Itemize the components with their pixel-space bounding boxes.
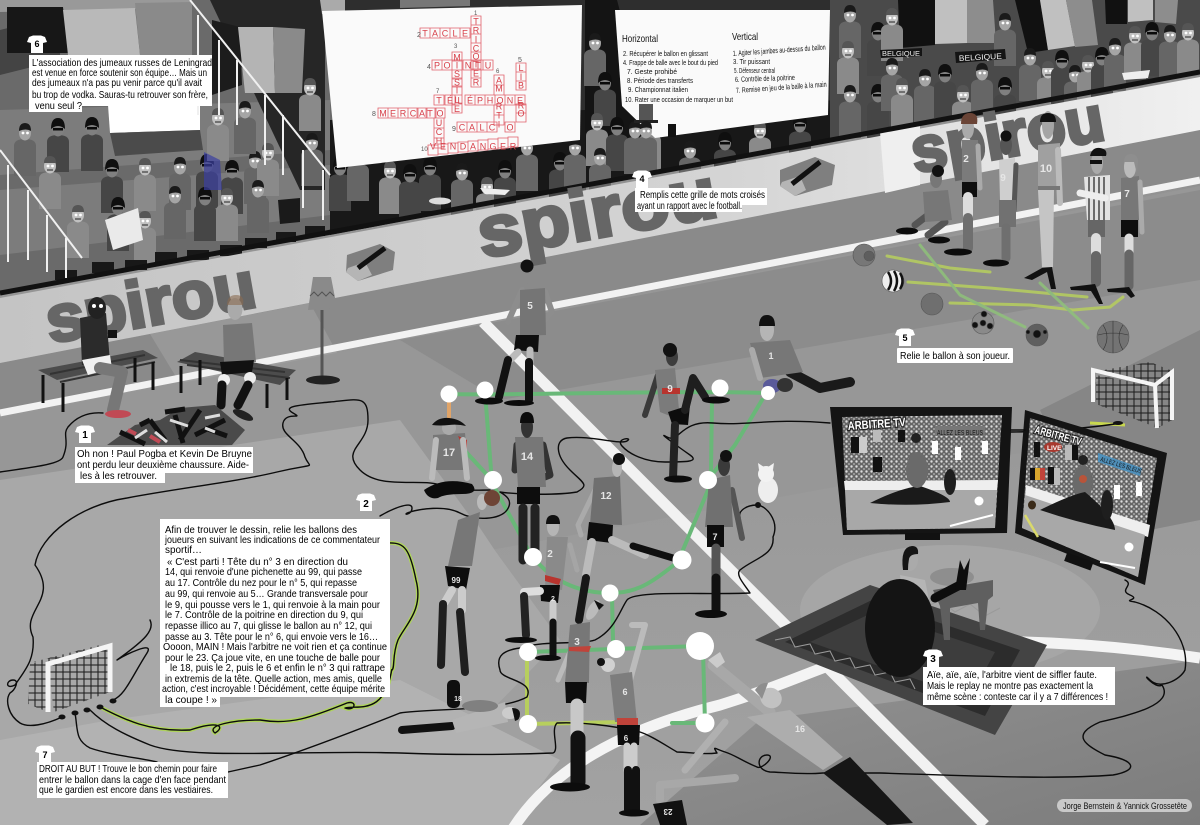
text box 2: commentator: « C'est parti ! Tête du n° 3 en direction du — [167, 556, 348, 568]
crossword grid: MERCATO — [379, 108, 444, 118]
player 23 upside down — [653, 722, 735, 825]
player 9 — [645, 343, 730, 482]
text box 6: twins: 6 — [34, 39, 40, 49]
text box 4: crossword — [632, 170, 767, 212]
player De Bruyne — [218, 295, 256, 423]
crowd: left stand — [14, 78, 323, 264]
text box 2: commentator — [160, 494, 390, 707]
player 5 — [475, 260, 552, 406]
TV left logo: ARBITRE TV — [847, 415, 906, 433]
white balls to connect — [440, 380, 775, 733]
crossword grid: U — [436, 118, 442, 128]
crossword grid: C — [436, 127, 443, 137]
player 5: 5 — [527, 301, 533, 312]
player 1 keeper lying — [750, 315, 850, 393]
cable maze — [0, 400, 1186, 777]
crossword grid: R — [496, 102, 503, 112]
crossword grid: 3 — [454, 44, 458, 50]
crossword grid: VENDANGER — [430, 142, 517, 152]
clues vertical: Vertical — [732, 31, 758, 43]
player 3 — [550, 598, 604, 792]
crossword grid: E — [473, 68, 479, 78]
player 12 — [578, 453, 683, 620]
rug — [755, 585, 1047, 735]
advertising boards — [0, 77, 1200, 363]
crossword grid: O — [472, 52, 480, 62]
text box 7: goal: que le gardien est encore dans les vestiaires. — [39, 784, 213, 796]
crossword grid: S — [454, 69, 460, 79]
TV link cable — [1011, 429, 1025, 431]
text box 5: balls: 5 — [902, 333, 908, 343]
crossword grid: T — [473, 60, 479, 70]
player 10 basketball — [1024, 111, 1060, 289]
clues horizontal: 7. Geste prohibé — [627, 67, 677, 76]
text box 1: shoes: ont perdu leur deuxième chaussure. Aide- — [77, 459, 249, 471]
crossword grid: 10 — [421, 147, 428, 153]
crossword grid: 5 — [518, 57, 522, 64]
spirou logo right: spirou — [905, 82, 1109, 187]
crossword grid: A — [496, 76, 502, 86]
goal left — [28, 645, 110, 712]
crowd: top right — [837, 5, 1199, 138]
crossword grid: L — [454, 95, 460, 105]
text box 3: replay: Aïe, aïe, aïe, l'arbitre vient de siffler faute. — [927, 669, 1097, 681]
player Pogba — [80, 297, 131, 418]
player sitting arms on knees, right side — [896, 165, 952, 244]
text box 7: goal — [35, 746, 228, 798]
text box 5: balls — [895, 328, 1013, 363]
crossword grid: R — [518, 100, 525, 110]
player 2 right: 2 — [963, 154, 969, 165]
panel: crossword clues sheet — [615, 10, 830, 138]
crossword grid: R — [473, 26, 480, 36]
bench right — [177, 352, 296, 408]
text box 2: commentator: Oooon, MAIN ! Mais l'arbitre ne voit rien et ça continue — [163, 641, 387, 653]
player 2 right — [944, 113, 980, 256]
player 99: 99 — [452, 576, 461, 585]
green highlighted cable to goal — [58, 543, 418, 733]
text box 1: shoes: les à les retrouver. — [80, 470, 157, 482]
green path network — [449, 392, 768, 724]
player 9 right: 9 — [1000, 173, 1006, 184]
clues vertical: 6. Contrôle de la poitrine — [735, 73, 795, 84]
player 2: 2 — [551, 596, 555, 603]
crossword grid: TÉLÉPHONE — [436, 96, 523, 106]
panel: crossword sheet — [322, 5, 582, 168]
text box 6: twins: est venue en force soutenir son équipe… Mais un — [32, 67, 207, 79]
TV right: ALLEZ LES BLEUS — [1099, 456, 1143, 476]
text box 6: twins: des jumeaux n'a pas pu venir parce qu'il avait — [32, 77, 202, 89]
spirou logo middle: spirou — [471, 153, 723, 274]
text box 5: balls: Relie le ballon à son joueur. — [900, 350, 1010, 362]
board cushion right — [780, 157, 835, 196]
seats front row — [55, 226, 325, 280]
text box 2: commentator: Afin de trouver le dessin, relie les ballons des — [165, 524, 357, 536]
crossword grid: I — [498, 120, 500, 130]
cat — [755, 463, 778, 508]
text box 4: crossword: Remplis cette grille de mots croisés — [640, 189, 765, 201]
player 9: 9 — [667, 384, 673, 395]
text box 2: commentator: joueurs en suivant les indications de ce commentateur — [164, 534, 380, 546]
text box 3: replay: Mais le replay ne montre pas exactement la — [927, 680, 1093, 692]
stair rails — [0, 0, 330, 278]
crossword grid: 7 — [436, 89, 440, 95]
text box 3: replay — [923, 650, 1115, 705]
banner: Belgique left — [880, 48, 922, 58]
crossword grid: 9 — [452, 126, 456, 133]
crossword grid: 6 — [496, 69, 500, 75]
text box 2: commentator: le 7. Contrôle de la poitrine en direction du 9, qui — [165, 609, 363, 621]
crossword grid: POINTU — [434, 60, 491, 70]
text box 2: commentator: 2 — [363, 499, 369, 510]
crossword grid: L — [518, 63, 524, 73]
TV right logo: ARBITRE TV — [1033, 424, 1083, 448]
crossword grid: T — [473, 16, 479, 26]
player 7 right — [1107, 154, 1142, 298]
crossword grid: R — [473, 78, 480, 88]
crossword grid: M — [495, 84, 503, 94]
player 7 — [695, 450, 742, 618]
stand rail black line — [0, 72, 1200, 293]
player 14: 14 — [521, 451, 534, 463]
text box 2: commentator: le 9, qui pousse vers le 1, qui renvoie à la main pour — [165, 599, 380, 611]
clues vertical: 3. Tir puissant — [733, 57, 771, 66]
banner: Belgique left: BELGIQUE — [882, 51, 920, 58]
crossword grid: CALCO — [459, 122, 514, 132]
clues vertical: 7. Remise en jeu de la balle à la main — [736, 80, 827, 95]
flags in stands — [7, 0, 1178, 156]
text box 7: goal: 7 — [42, 750, 48, 760]
clues vertical: 1. Agiter les jambes au-dessus du ballon — [733, 43, 826, 58]
crossword grid: I — [475, 34, 477, 44]
clues horizontal: 2. Récupérer le ballon en glissant — [623, 49, 709, 58]
TV viewer on armchair — [865, 546, 993, 677]
player 14 — [515, 412, 550, 560]
player 9 right — [983, 130, 1016, 266]
player 6: 6 — [624, 734, 629, 743]
player 6: 6 — [622, 687, 628, 697]
banner: Belgique right: BELGIQUE — [959, 52, 1002, 63]
clues vertical: 5. Défenseur central — [734, 66, 775, 75]
text box 2: commentator: au 99, qui renvoie au 5… Grande transversale pour — [165, 588, 368, 600]
player 17 seated: 17 — [443, 447, 455, 459]
text box 2: commentator: passe au 3. Tête pour le n° 6, qui envoie vers le 16… — [165, 631, 378, 643]
crossword grid: 1 — [474, 11, 478, 17]
player 18 lying — [402, 680, 520, 733]
spirou logo left: spirou — [40, 247, 261, 357]
text box 3: replay: même scène : conteste car il y a 7 différences ! — [927, 691, 1108, 703]
text box 6: twins: bu trop de vodka. Sauras-tu retrouver son frère, — [32, 89, 208, 101]
referee — [1070, 148, 1110, 304]
player 10 basketball: 10 — [1040, 163, 1052, 175]
player 7: 7 — [712, 532, 718, 542]
goalkeeper 16: 16 — [795, 724, 805, 734]
text box 4: crossword: ayant un rapport avec le football. — [637, 200, 742, 212]
player 3: 3 — [574, 637, 580, 648]
player 17 seated — [424, 418, 474, 498]
clues horizontal: 8. Période des transferts — [627, 76, 693, 85]
clues vertical — [732, 31, 827, 95]
text box 6: twins: L'association des jumeaux russes de Leningrad — [32, 57, 212, 69]
goalkeeper 16 — [708, 652, 913, 825]
crossword grid: E — [454, 104, 460, 114]
crossword grid: 4 — [427, 64, 431, 71]
text box 2: commentator: pour le 23. Ça joue vite, en une touche de balle pour — [165, 652, 380, 664]
clues horizontal: 9. Championnat italien — [628, 85, 688, 94]
crossword grid: H — [436, 136, 442, 146]
crossword grid: I — [456, 86, 458, 96]
TV left: ALLEZ LES BLEUS — [937, 430, 983, 437]
text box 2: commentator: action, c'est incroyable ! Décidément, cette équipe mérite — [162, 683, 385, 695]
player 2 — [505, 515, 577, 661]
text box 2: commentator: repasse illico au 7, qui glisse le ballon au n° 12, qui — [165, 620, 372, 632]
stands background — [0, 0, 1200, 295]
crossword grid: C — [473, 44, 480, 54]
balls set — [853, 244, 1129, 353]
lamp — [306, 277, 340, 384]
text box 1: shoes — [75, 426, 253, 483]
player 2: 2 — [547, 549, 553, 560]
text box 2: commentator: le 18, puis le 2, puis le 6 et enfin le n° 3 qui rattrape — [170, 662, 385, 674]
crossword grid: M — [453, 52, 461, 62]
ball-to-player lines — [887, 245, 1123, 328]
crossword grid: S — [454, 78, 460, 88]
clues horizontal — [622, 33, 734, 104]
crossword grid: 2 — [417, 32, 421, 39]
text box 6: twins: venu seul ? — [35, 100, 82, 112]
bench left — [38, 350, 158, 412]
fan with top hat in front of clues — [634, 104, 676, 174]
text box 7: goal: entrer le ballon dans la cage d'en face pendant — [39, 774, 226, 786]
text box 2: commentator: au 17. Contrôle du nez pour le n° 5, qui repasse — [165, 577, 357, 589]
crossword grid — [372, 11, 526, 155]
player 7 right: 7 — [1124, 189, 1130, 200]
TV right: LIVE — [1047, 445, 1062, 452]
text box 2: commentator: in extremis de la tête. Quelle action, mes amis, quelle — [165, 673, 382, 685]
text box 2: commentator: la coupe ! » — [165, 694, 217, 706]
TV left — [830, 407, 1012, 540]
player 23 upside down: 23 — [663, 807, 672, 816]
text box 2: commentator: 14, qui renvoie d'une pichenette au 99, qui passe — [165, 566, 362, 578]
player 99 — [425, 490, 500, 672]
text box 4: crossword: 4 — [639, 174, 645, 184]
crossword grid: T — [496, 110, 502, 120]
text box 1: shoes: Oh non ! Paul Pogba et Kevin De Bruyne — [77, 448, 252, 460]
goal right — [1010, 362, 1172, 432]
player 6 — [597, 625, 649, 816]
text box 3: replay: 3 — [930, 654, 936, 665]
crowd: under crossword — [329, 33, 811, 230]
pitch white lines — [0, 180, 1200, 825]
clues horizontal: 10. Rater une occasion de marquer un but — [625, 95, 734, 104]
banner: Belgique right — [955, 49, 1006, 63]
player 1 keeper lying: 1 — [768, 351, 774, 361]
shoe pile — [107, 405, 245, 445]
player 12: 12 — [600, 491, 612, 502]
crossword grid: TACLE — [422, 28, 468, 38]
crossword grid: B — [518, 80, 524, 90]
board cushion left — [346, 244, 395, 281]
text box 7: goal: DROIT AU BUT ! Trouve le bon chemin pour faire — [39, 763, 217, 775]
TV right — [1015, 410, 1167, 585]
clues horizontal: Horizontal — [622, 33, 658, 45]
player 18 lying: 18 — [454, 696, 462, 703]
crossword grid: O — [517, 108, 525, 118]
crossword grid: I — [520, 72, 522, 82]
crossword grid: 8 — [372, 111, 376, 118]
clues horizontal: 4. Frappe de balle avec le bout du pied — [623, 58, 718, 67]
text box 6: twins — [27, 36, 212, 112]
text box 1: shoes: 1 — [82, 430, 88, 441]
text box 2: commentator: sportif… — [165, 544, 202, 556]
